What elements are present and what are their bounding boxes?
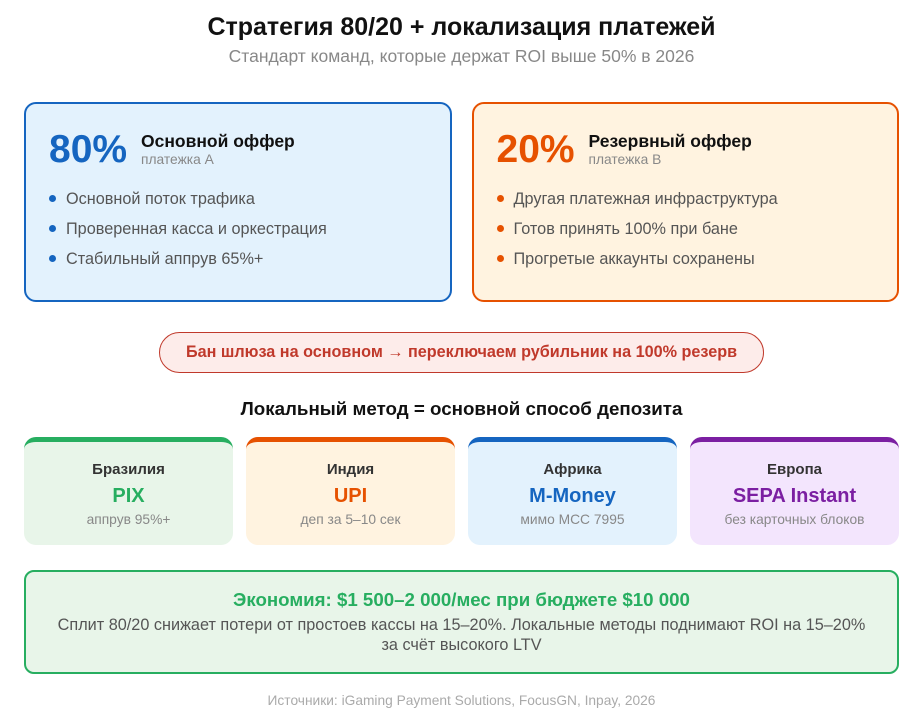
panel: primary offer 80%	[24, 102, 452, 302]
section heading: local methods: Локальный метод = основной способ депозита	[241, 398, 682, 419]
subtitle: Стандарт команд, которые держат ROI выше 50% в 2026	[229, 46, 694, 66]
reserve bullet marker 1	[496, 195, 504, 202]
region name: Бразилия	[92, 461, 165, 478]
savings description: Сплит 80/20 снижает потери от простоев кассы на 15–20%. Локальные методы поднимают ROI на 15–20%	[58, 616, 865, 634]
reserve percentage: 20%	[496, 128, 575, 171]
method note: без карточных блоков	[724, 512, 864, 527]
primary bullet text 3: Стабильный аппрув 65%+	[66, 250, 263, 268]
savings description	[58, 616, 865, 654]
primary bullet text 1: Основной поток трафика	[66, 190, 255, 208]
panel: Brazil	[24, 437, 233, 545]
region name: Индия	[327, 461, 374, 478]
reserve offer heading: Резервный оффер	[588, 131, 752, 151]
reserve bullet marker 2	[496, 225, 504, 232]
method note: мимо MCC 7995	[520, 512, 625, 527]
method note: деп за 5–10 сек	[300, 512, 400, 527]
panel: savings summary	[24, 570, 899, 674]
payment method: M-Money	[529, 485, 616, 507]
panel: reserve offer 20%	[472, 102, 899, 302]
savings heading: Экономия: $1 500–2 000/мес при бюджете $10 000	[233, 589, 690, 610]
panel: India	[246, 437, 455, 545]
region name: Европа	[767, 461, 822, 478]
callout: gateway ban switch	[159, 332, 764, 373]
payment method: SEPA Instant	[733, 485, 856, 507]
primary bullet marker 1	[49, 195, 56, 202]
panel: Europe	[690, 437, 899, 545]
primary bullet text 2: Проверенная касса и оркестрация	[66, 220, 327, 238]
primary percentage: 80%	[49, 128, 127, 171]
primary bullet marker 2	[49, 225, 56, 232]
primary bullet marker 3	[49, 255, 56, 262]
payment method: PIX	[112, 485, 145, 507]
primary offer caption: платежка A	[141, 152, 214, 167]
callout: gateway ban switch: Бан шлюза на основном → переключаем рубильник на 100% резерв	[186, 343, 737, 361]
primary offer heading: Основной оффер	[141, 131, 295, 151]
savings description: за счёт высокого LTV	[381, 636, 542, 654]
region name: Африка	[543, 461, 602, 478]
panel: Africa	[468, 437, 677, 545]
reserve bullet text 3: Прогретые аккаунты сохранены	[514, 250, 755, 268]
title: Стратегия 80/20 + локализация платежей	[207, 13, 716, 41]
reserve bullet text 2: Готов принять 100% при бане	[514, 220, 738, 238]
reserve bullet text 1: Другая платежная инфраструктура	[514, 190, 778, 208]
payment method: UPI	[334, 485, 367, 507]
reserve bullet marker 3	[496, 255, 504, 262]
method note: аппрув 95%+	[87, 512, 170, 527]
reserve offer caption: платежка B	[588, 152, 661, 167]
sources footnote: Источники: iGaming Payment Solutions, FocusGN, Inpay, 2026	[268, 693, 655, 708]
